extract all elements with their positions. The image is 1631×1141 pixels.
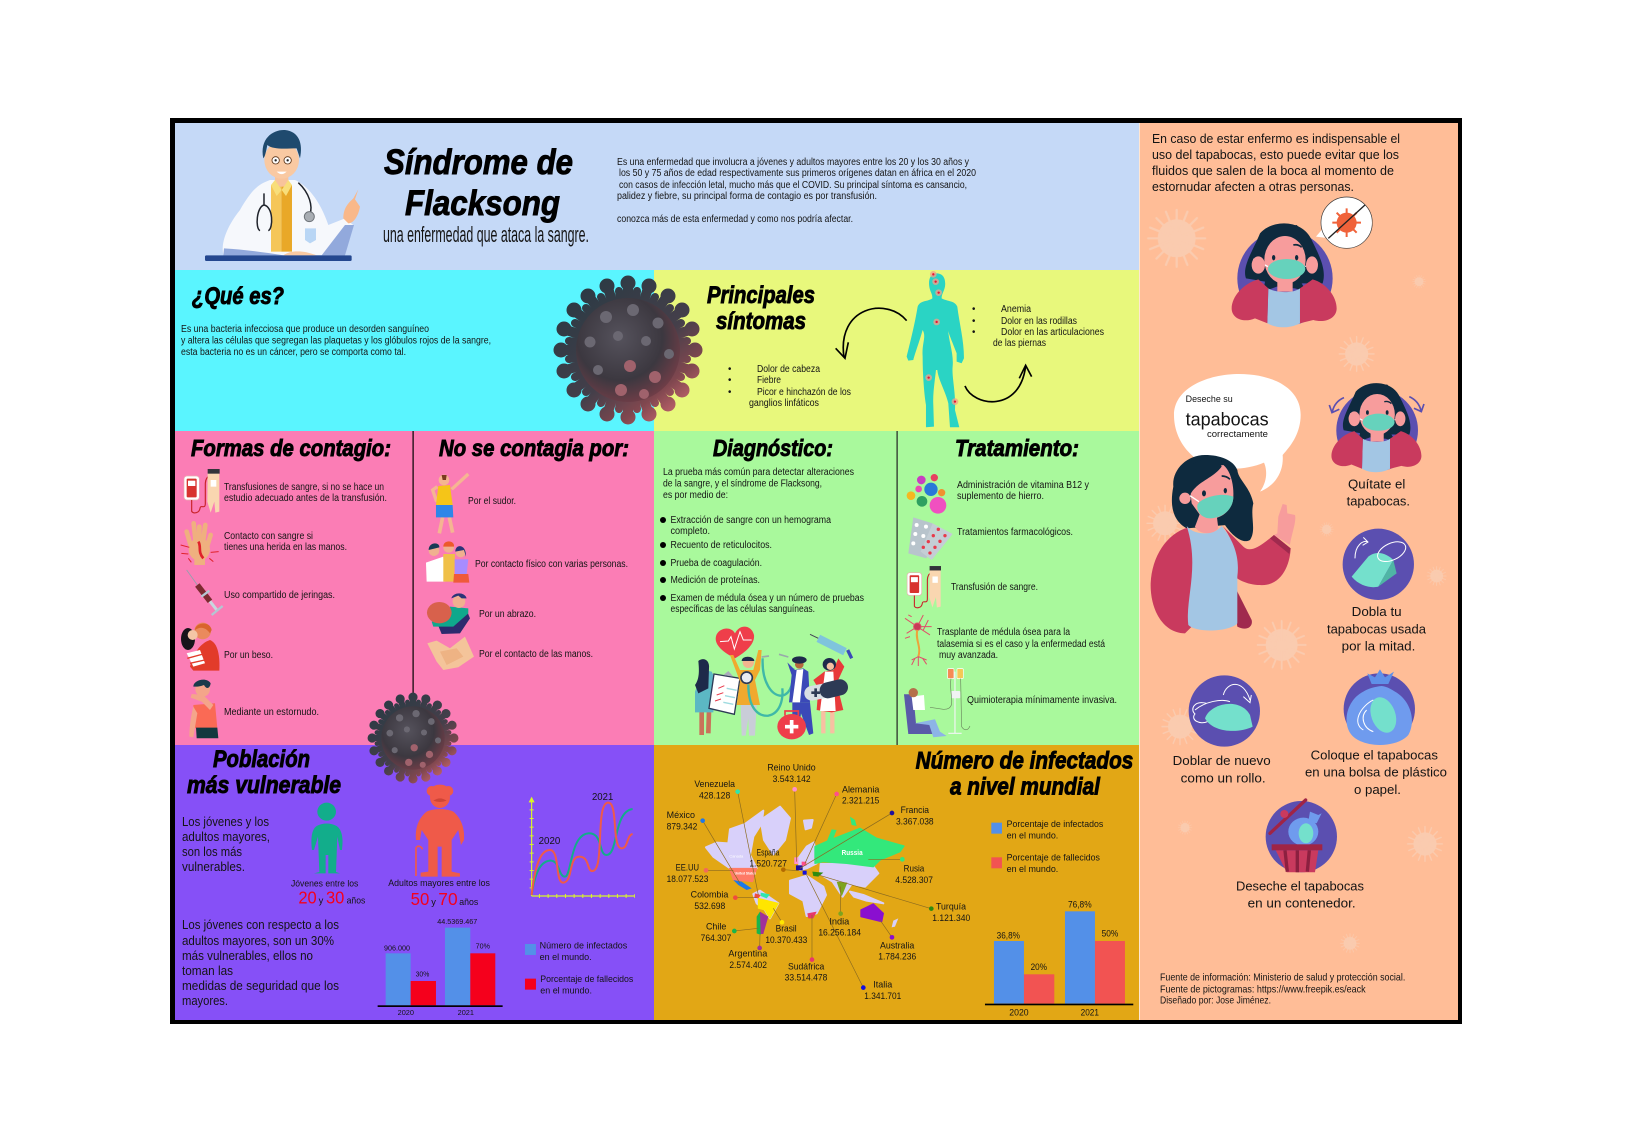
footer sources — [1160, 973, 1405, 1007]
country labels: Sudáfrica — [788, 961, 825, 972]
footer sources: Fuente de información: Ministerio de salud y protección social. — [1160, 973, 1405, 984]
vulnerable text 2 — [182, 918, 339, 1008]
country labels: Alemania — [842, 785, 880, 796]
diagnosis bullets: Extracción de sangre con un hemograma — [670, 515, 832, 526]
panel: qué es — [175, 270, 654, 431]
heading: qué es: ¿Qué es? — [192, 283, 284, 310]
panel: header — [175, 123, 1139, 270]
icon: sneeze — [189, 680, 218, 738]
symptoms list left: Dolor de cabeza — [757, 364, 821, 375]
country labels: 764.307 — [701, 933, 731, 944]
caption: coloque: Coloque el tapabocas — [1311, 749, 1438, 763]
country labels: Colombia — [691, 890, 729, 901]
country labels: India — [829, 916, 850, 927]
intro text — [617, 157, 977, 225]
vulnerable text 2: más vulnerables, ellos no — [182, 949, 313, 963]
world map: Canada — [729, 853, 744, 858]
contagion pictograms — [181, 469, 223, 738]
non-contagion items text — [468, 496, 628, 660]
bar chart legend: en el mundo. — [540, 952, 592, 963]
line chart — [529, 792, 635, 896]
country labels: Turquía — [936, 902, 967, 913]
symptoms list right: Anemia — [1001, 304, 1032, 315]
icon: no virus bubble — [1316, 197, 1372, 248]
panel: formas de contagio y no se contagia — [175, 431, 654, 745]
icon: fold mask — [1343, 529, 1414, 600]
intro text: uso del tapabocas, esto puede evitar que los — [1152, 147, 1399, 162]
panel: población más vulnerable — [175, 745, 654, 1020]
country labels: Chile — [706, 922, 726, 933]
leader lines and dots — [700, 787, 934, 990]
symptoms list left — [728, 364, 851, 409]
country labels: España — [757, 847, 780, 858]
panel: principales síntomas — [654, 270, 1139, 431]
caption: dobla — [1327, 605, 1427, 653]
icon: hug — [427, 593, 470, 634]
vulnerable text 1: son los más — [182, 845, 242, 859]
footer sources: Diseñado por: Jose Jiménez. — [1160, 996, 1271, 1007]
percent bar chart: 36,8% — [997, 931, 1020, 941]
diagnosis bullets: Recuento de reticulocitos. — [670, 540, 772, 551]
country labels: 1.784.236 — [878, 952, 916, 963]
contagion items text: Transfusiones de sangre, si no se hace un — [224, 482, 384, 493]
treatment text: suplemento de hierro. — [957, 491, 1044, 502]
symptoms list left: Picor e hinchazón de los — [757, 387, 851, 398]
country labels: EE.UU — [676, 862, 699, 873]
country labels: 1.520.727 — [749, 859, 787, 870]
caption: deseche — [1236, 880, 1364, 911]
caption: quítate: tapabocas. — [1347, 495, 1410, 509]
icon: young person — [311, 803, 343, 873]
diagnosis text: La prueba más común para detectar alteraciones — [663, 467, 854, 478]
contagion items text: Por un beso. — [224, 650, 273, 661]
country labels: Italia — [873, 980, 893, 991]
icon: roll mask — [1189, 675, 1260, 747]
treatment text: muy avanzada. — [939, 650, 998, 661]
world map: Russia — [842, 848, 863, 857]
country labels: Brasil — [776, 924, 797, 935]
diagnosis text: de la sangre, y el síndrome de Flacksong, — [663, 478, 822, 490]
country labels: 3.543.142 — [773, 774, 811, 785]
icon: transfusion — [184, 469, 220, 513]
bar chart legend: en el mundo. — [540, 986, 592, 997]
caption: quítate: Quítate el — [1348, 477, 1405, 491]
bar chart: infected and deaths: 44.5369.467 — [437, 917, 477, 926]
caption: deseche: Deseche el tapabocas — [1236, 880, 1364, 894]
heading: número de infectados: a nivel mundial — [950, 773, 1101, 800]
symptoms list right: • — [972, 316, 976, 327]
percent legend: Porcentaje de fallecidos — [1007, 853, 1100, 864]
contagion items text — [224, 482, 387, 718]
label: adult age range: 70 — [438, 889, 458, 909]
heading: diagnóstico: Diagnóstico: — [713, 435, 833, 461]
percent legend: en el mundo. — [1007, 864, 1058, 875]
icon: group of friends — [426, 541, 469, 583]
treatment text: Tratamientos farmacológicos. — [957, 527, 1073, 538]
illustration: medical team — [695, 627, 852, 739]
non-contagion items text: Por el sudor. — [468, 496, 516, 507]
contagion items text: Uso compartido de jeringas. — [224, 590, 335, 601]
title — [384, 143, 573, 223]
symptoms list right — [972, 304, 1104, 349]
bar chart: infected and deaths: 2021 — [458, 1008, 474, 1017]
non-contagion pictograms — [426, 474, 474, 670]
percent bar chart: 20% — [1031, 962, 1047, 972]
non-contagion items text: Por un abrazo. — [479, 609, 536, 620]
percent legend — [991, 819, 1104, 875]
symptoms list left: • — [728, 387, 732, 398]
vulnerable text 2: adultos mayores, son un 30% — [182, 934, 334, 948]
percent bar chart: 2021 — [1081, 1007, 1099, 1017]
country labels: Australia — [880, 940, 915, 951]
arrow: curved to left list — [836, 308, 907, 358]
bar chart legend — [525, 941, 634, 997]
diagnosis bullets: Prueba de coagulación. — [670, 558, 762, 569]
vulnerable text 2: medidas de seguridad que los — [182, 979, 339, 993]
caption: coloque: en una bolsa de plástico — [1305, 766, 1447, 780]
percent legend: en el mundo. — [1007, 830, 1058, 841]
label: adult age range: Adultos mayores entre los — [388, 878, 490, 888]
label: young age range: 30 — [326, 887, 344, 907]
label: adult age range — [388, 878, 490, 909]
speech bubble: correctamente — [1207, 429, 1268, 439]
bar chart: infected and deaths — [378, 917, 503, 1017]
caption: doblar: Doblar de nuevo — [1173, 754, 1271, 768]
country labels: 3.367.038 — [896, 816, 934, 827]
speech bubble — [1174, 374, 1301, 492]
country labels: 879.342 — [667, 821, 697, 832]
illustration: woman wearing mask, small, with arrows — [1329, 383, 1424, 472]
heading: tratamiento: Tratamiento: — [955, 435, 1079, 461]
icon: wounded hand — [181, 523, 219, 565]
definition text: esta bacteria no es un cáncer, pero se comporta como tal. — [181, 347, 406, 358]
diagnosis bullets: completo. — [670, 526, 710, 537]
vulnerable text 1: Los jóvenes y los — [182, 815, 269, 829]
speech bubble: Deseche su — [1186, 394, 1233, 404]
treatment text: Transfusión de sangre. — [951, 582, 1038, 593]
country labels: Francia — [901, 805, 930, 816]
icon: kiss — [181, 623, 219, 671]
subtitle: una enfermedad que ataca la sangre. — [383, 222, 589, 247]
symptoms list left: • — [728, 364, 732, 375]
heading: población: Población — [213, 746, 310, 773]
symptoms list right: • — [972, 304, 976, 315]
symptoms list right: Dolor en las articulaciones — [1001, 327, 1104, 338]
symptoms list left: Fiebre — [757, 375, 781, 386]
treatment pictograms — [904, 474, 970, 737]
bar chart legend: Número de infectados — [540, 941, 628, 952]
country labels: 2.321.215 — [842, 796, 879, 807]
icon: older adult — [416, 785, 464, 877]
line chart: 2021 — [592, 792, 614, 803]
country labels: Argentina — [728, 949, 768, 960]
intro text: los 50 y 75 años de edad respectivamente sus primeros orígenes datan en áfrica en el 2020 — [619, 168, 977, 179]
heading: población — [187, 746, 341, 799]
treatment text: Administración de vitamina B12 y — [957, 480, 1089, 491]
arrow: curved to right list — [965, 365, 1032, 402]
contagion items text: tienes una herida en las manos. — [224, 542, 347, 553]
icon: bin — [1266, 800, 1337, 872]
bar chart legend: Porcentaje de fallecidos — [540, 974, 634, 985]
treatment text: talasemia si es el caso y la enfermedad está — [937, 639, 1106, 650]
heading: síntomas — [707, 282, 815, 335]
icon: syringe — [187, 570, 223, 615]
contagion items text: estudio adecuado antes de la transfusión. — [224, 493, 387, 504]
treatment text: Quimioterapia mínimamente invasiva. — [967, 695, 1117, 706]
icon: doctor — [205, 130, 360, 261]
definition text — [181, 324, 491, 358]
label: adult age range: años — [459, 897, 479, 907]
country labels: 33.514.478 — [785, 973, 827, 984]
heading: población: más vulnerable — [187, 772, 341, 799]
intro text: palidez y fiebre, su principal forma de contagio es por transfusión. — [617, 191, 877, 202]
icon: sweating man — [433, 474, 468, 533]
line chart: 2020 — [539, 836, 561, 847]
percent bar chart: 76,8% — [1068, 899, 1092, 909]
caption: doblar: como un rollo. — [1181, 771, 1266, 785]
heading: número de infectados: Número de infectados — [916, 747, 1133, 774]
symptoms list right: Dolor en las rodillas — [1001, 316, 1077, 327]
caption: deseche: en un contenedor. — [1248, 897, 1356, 911]
percent bar chart: 50% — [1102, 928, 1118, 938]
vulnerable text 1: adultos mayores, — [182, 830, 270, 844]
country labels: 16.256.184 — [818, 928, 861, 939]
footer sources: Fuente de pictogramas: https://www.freepik.es/eack — [1160, 984, 1366, 995]
illustration: woman with mask — [1232, 223, 1337, 327]
country labels: 1.121.340 — [932, 913, 970, 924]
panel: número de infectados — [654, 745, 1139, 1020]
label: young age range: años — [347, 895, 366, 905]
contagion items text: Mediante un estornudo. — [224, 707, 319, 718]
vulnerable text 2: Los jóvenes con respecto a los — [182, 918, 339, 932]
country labels: 532.698 — [694, 901, 725, 912]
icon: pill blisters — [908, 517, 953, 560]
intro text: fluidos que salen de la boca al momento de — [1152, 163, 1394, 178]
heading: número de infectados — [916, 747, 1133, 800]
non-contagion items text: Por el contacto de las manos. — [479, 649, 593, 660]
country labels: México — [667, 810, 695, 821]
country labels: 428.128 — [699, 791, 730, 802]
icon: human body with pain points — [907, 271, 964, 427]
background virus decorations — [1147, 210, 1446, 953]
vulnerable text 1 — [182, 815, 270, 874]
country labels: 2.574.402 — [729, 960, 767, 971]
icon: small virus — [372, 697, 454, 779]
country labels: Rusia — [904, 864, 925, 875]
caption: dobla: por la mitad. — [1342, 639, 1415, 653]
panel: tapabocas — [1139, 123, 1458, 1020]
icon: transfusion — [907, 566, 941, 608]
definition text: Es una bacteria infecciosa que produce un desorden sanguíneo — [181, 324, 429, 335]
title: Flacksong — [405, 184, 560, 223]
label: adult age range: y — [431, 897, 436, 907]
treatment text: Trasplante de médula ósea para la — [937, 627, 1071, 638]
panel: diagnóstico y tratamiento — [654, 431, 1139, 745]
bar chart: infected and deaths: 906.000 — [384, 944, 410, 953]
vulnerable text 2: mayores. — [182, 994, 228, 1008]
intro text — [1152, 131, 1400, 194]
symptoms list left: • — [728, 375, 732, 386]
caption: dobla: Dobla tu — [1352, 605, 1402, 619]
symptoms list left: ganglios linfáticos — [749, 398, 819, 409]
icon: mask in bag — [1344, 669, 1415, 745]
black frame — [170, 118, 1462, 1024]
caption: coloque — [1305, 749, 1447, 797]
intro text: En caso de estar enfermo es indispensable el — [1152, 131, 1400, 146]
country labels: 4.528.307 — [895, 875, 933, 886]
definition text: y altera las células que segregan las plaquetas y los glóbulos rojos de la sangre, — [181, 336, 491, 346]
diagnosis text: es por medio de: — [663, 490, 728, 501]
vulnerable text 2: toman las — [182, 964, 233, 978]
diagnosis bullets: específicas de las células sanguíneas. — [670, 604, 815, 615]
caption: coloque: o papel. — [1354, 783, 1401, 797]
bar chart: infected and deaths: 2020 — [398, 1008, 414, 1017]
caption: dobla: tapabocas usada — [1327, 622, 1427, 636]
label: adult age range: 50 — [411, 889, 429, 909]
intro text: conozca más de esta enfermedad y como nos podría afectar. — [617, 214, 853, 225]
caption: doblar — [1173, 754, 1271, 785]
symptoms list right: de las piernas — [993, 338, 1046, 349]
diagnosis bullets: Medición de proteínas. — [670, 575, 760, 586]
diagnosis bullets — [660, 515, 864, 615]
symptoms list right: • — [972, 327, 976, 338]
bar chart: infected and deaths: 30% — [416, 970, 430, 979]
title: Síndrome de — [384, 143, 573, 182]
percent bar chart: 2020 — [1009, 1007, 1029, 1017]
illustration: woman pointing with mask — [1151, 455, 1295, 633]
country labels: 18.077.523 — [667, 874, 708, 885]
intro text: estornudar afecten a otras personas. — [1152, 179, 1354, 194]
treatment text — [937, 480, 1117, 706]
non-contagion items text: Por contacto físico con varias personas. — [475, 559, 628, 570]
intro text: Es una enfermedad que involucra a jóvenes y adultos mayores entre los 20 y los 30 años y — [617, 157, 969, 168]
heading: síntomas: Principales — [707, 282, 815, 309]
contagion items text: Contacto con sangre si — [224, 531, 313, 542]
icon: vitamins — [907, 474, 946, 514]
world map — [706, 807, 904, 935]
label: young age range: 20 — [298, 887, 317, 907]
country labels: 1.341.701 — [864, 991, 901, 1002]
world map: United States — [735, 872, 756, 876]
label: young age range: y — [319, 895, 324, 905]
bar chart: infected and deaths: 70% — [476, 942, 490, 951]
country labels: Reino Unido — [767, 763, 816, 774]
vulnerable text 1: vulnerables. — [182, 860, 245, 874]
icon: chemotherapy patient — [904, 669, 970, 737]
heading: formas de contagio: Formas de contagio: — [191, 435, 391, 461]
heading: síntomas: síntomas — [716, 308, 806, 335]
speech bubble: tapabocas — [1186, 409, 1269, 430]
icon: handshake — [427, 637, 474, 670]
label: young age range — [291, 879, 366, 907]
diagnosis text — [663, 467, 854, 501]
caption: quítate — [1347, 477, 1410, 509]
country labels: Venezuela — [694, 779, 736, 790]
icon: large virus — [560, 282, 696, 418]
percent bar chart — [985, 899, 1133, 1017]
heading: no se contagia por: No se contagia por: — [439, 435, 629, 461]
icon: neuron — [905, 615, 932, 666]
percent legend: Porcentaje de infectados — [1007, 819, 1104, 830]
label: young age range: Jóvenes entre los — [291, 879, 359, 889]
intro text: con casos de infección letal, mucho más que el COVID. Su principal síntoma es cansancio, — [619, 180, 967, 191]
country labels: 10.370.433 — [765, 935, 807, 946]
country labels — [667, 763, 970, 1002]
diagnosis bullets: Examen de médula ósea y un número de pruebas — [670, 593, 864, 604]
